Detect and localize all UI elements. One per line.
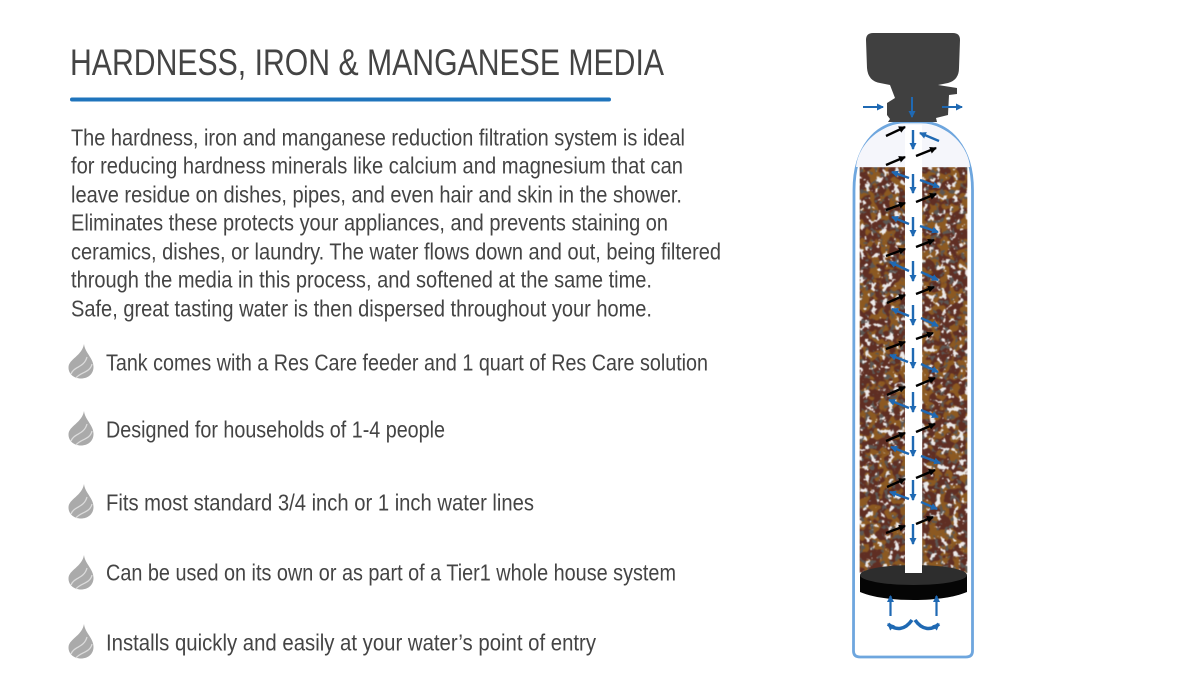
bullet: households — [68, 411, 445, 446]
bullet: Res Care feeder — [68, 344, 708, 378]
black flow arrows — [886, 127, 936, 533]
description paragraph: The hardness, iron and manganese reduction filtration system is ideal — [71, 124, 685, 150]
description paragraph: for reducing hardness minerals like calcium and magnesium that can — [71, 152, 683, 178]
bullet: installs quickly: Installs quickly and easily at your water’s point of entry — [106, 630, 596, 656]
description paragraph: through the media in this process, and softened at the same time. — [71, 266, 652, 292]
title: HARDNESS, IRON & MANGANESE MEDIA — [70, 42, 664, 83]
description paragraph: Safe, great tasting water is then dispersed throughout your home. — [71, 296, 652, 322]
base plate — [860, 565, 967, 600]
description paragraph — [71, 124, 721, 322]
center riser tube — [905, 125, 922, 573]
bullet: Res Care feeder: Tank comes with a Res Care feeder and 1 quart of Res Care solution — [106, 350, 708, 376]
bullet: whole house system: Can be used on its own or as part of a Tier1 whole house system — [106, 560, 676, 586]
description paragraph: leave residue on dishes, pipes, and even hair and skin in the shower. — [71, 182, 682, 208]
bottom intake arrows — [888, 596, 939, 629]
title underline — [70, 98, 611, 102]
tank outline — [854, 122, 972, 657]
dome headspace — [856, 124, 970, 167]
bullet: whole house system — [68, 555, 676, 590]
filter tank diagram — [854, 33, 972, 657]
media bed left — [860, 167, 906, 573]
bullet: water lines: Fits most standard 3/4 inch or 1 inch water lines — [106, 490, 534, 516]
blue flow arrows — [889, 130, 940, 544]
inlet and outlet arrows — [863, 97, 962, 117]
description paragraph: Eliminates these protects your appliances, and prevents staining on — [71, 210, 668, 236]
control valve head — [866, 33, 960, 122]
bullet: households: Designed for households of 1-4 people — [106, 416, 445, 442]
description paragraph: ceramics, dishes, or laundry. The water flows down and out, being filtered — [71, 238, 721, 264]
bullet: installs quickly — [68, 624, 596, 658]
media bed right — [922, 167, 968, 573]
bullet: water lines — [68, 484, 534, 518]
